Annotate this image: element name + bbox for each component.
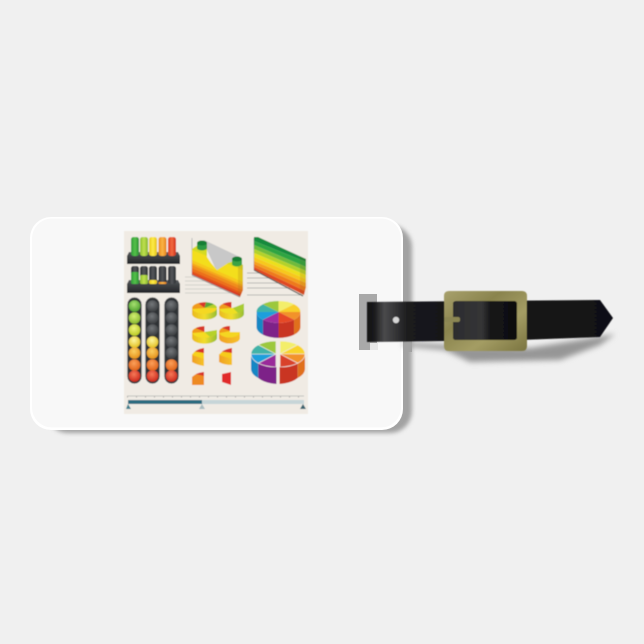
small pie sequence [192,301,244,385]
ball gauge columns [128,298,178,384]
orange wedge [192,372,204,385]
gauge column three [164,298,178,384]
exploded pie sides [251,354,305,384]
pie with three slices missing [219,326,240,344]
luggage tag product image [30,217,615,436]
red wedge [222,372,231,385]
pie top slices [256,301,300,323]
exploded pie top slices [251,341,305,367]
white luggage tag body [30,217,403,430]
left green cap [197,240,207,250]
strap hole [393,317,399,323]
second quarter wedge pie [219,348,232,365]
vertical shadow under strap [403,340,412,352]
layered diagonal area chart [247,237,306,296]
leather strap [367,300,613,342]
pie sides [256,312,300,338]
quarter wedge pie [192,348,204,366]
gauge column one [128,298,142,384]
strap slot in tag [359,294,378,350]
pie missing one slice [219,301,244,320]
gauge column two [146,298,160,384]
buckle pin [444,317,460,322]
pie with two slices missing [192,325,218,344]
full pie [192,302,217,320]
timeline slider [126,396,306,409]
tag drop shadow [46,225,412,433]
artwork panel [124,231,308,414]
right green cap [232,256,242,266]
stepped area chart [185,238,246,300]
strap loop inside buckle [453,301,517,340]
metal buckle [444,291,527,351]
top rack of full test tubes [127,237,180,264]
bottom rack of partly filled test tubes [127,266,180,293]
exploded pie chart [251,341,305,384]
large pie chart [256,301,300,338]
strap shadow [403,334,615,362]
